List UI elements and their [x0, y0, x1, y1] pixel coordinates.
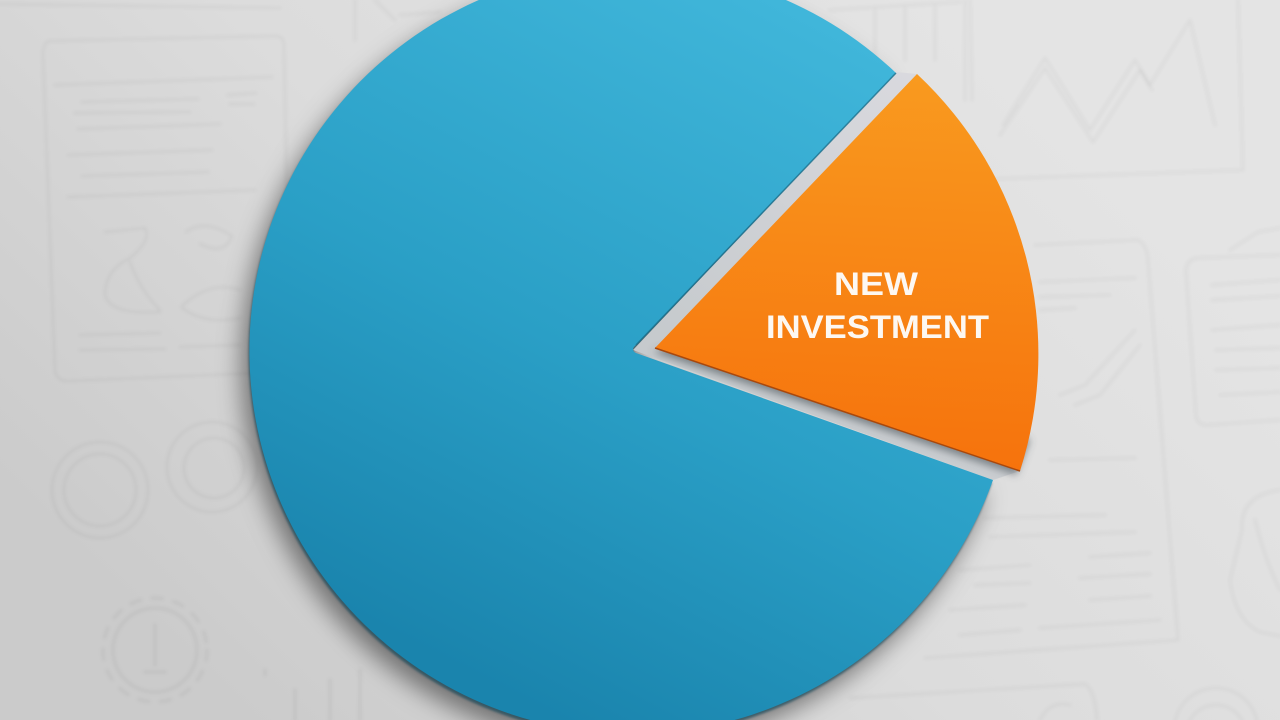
label: new investment: INVESTMENT — [766, 309, 989, 345]
label: new investment — [766, 266, 989, 345]
pie slice: new investment — [655, 74, 1038, 471]
chart gap behind the slices — [633, 72, 1020, 480]
pie shadow — [241, 0, 992, 720]
sketch: line chart frame, top right — [355, 0, 1243, 180]
sketch: clipboard, lower right edge — [1230, 490, 1280, 636]
sketch: report document, right — [925, 240, 1178, 658]
sketch: gear and bars, bottom left — [103, 598, 360, 720]
dark lower edge of orange wedge — [655, 348, 1020, 471]
label: new investment: NEW — [834, 266, 919, 302]
sketch: top left line — [0, 4, 280, 8]
dark edge of blue slice along the gap — [636, 73, 896, 345]
sketch: card and circle, bottom right — [850, 684, 1258, 720]
sketch: small checklist card, right edge — [1186, 228, 1280, 425]
orange wedge — [655, 74, 1038, 471]
pie slice: large blue section — [249, 0, 993, 720]
shadow under orange slice — [653, 300, 1030, 475]
sketch: round badges, lower left — [52, 422, 257, 538]
sketch: report document, left — [43, 36, 290, 381]
